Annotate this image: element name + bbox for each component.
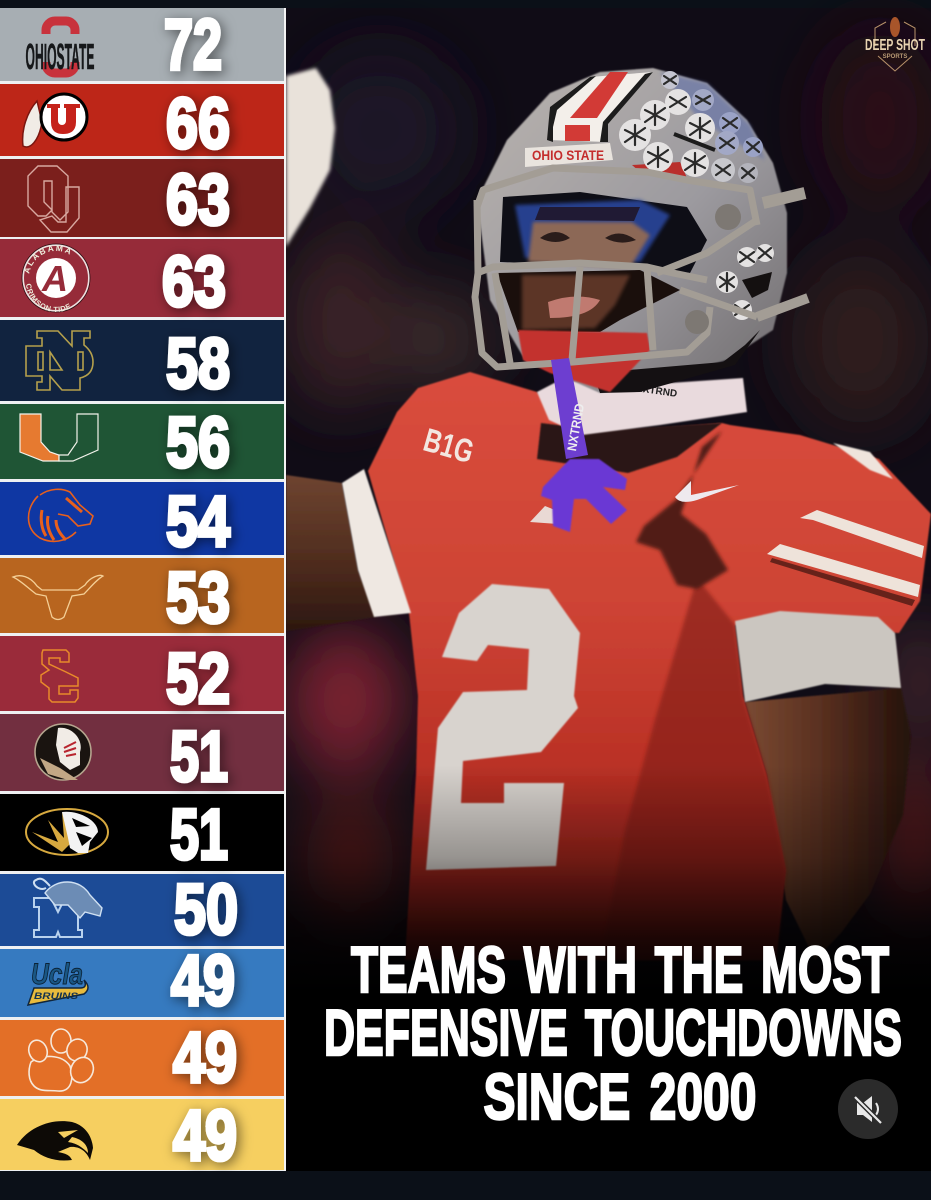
logo: Memphis — [34, 879, 102, 937]
purple mouthguard: NXTRND — [564, 402, 587, 452]
bottom fade — [286, 765, 931, 995]
icon: Deep Shot Sports logo: SPORTS — [883, 54, 907, 60]
facemask — [475, 168, 808, 367]
jersey number 2 — [426, 584, 580, 870]
chin guard — [518, 330, 650, 392]
logo: UCLA: Ucla — [31, 958, 83, 991]
logo: UCLA — [28, 958, 88, 1005]
logo: Florida State — [35, 724, 91, 780]
glove — [286, 68, 335, 247]
logo: Alabama: ALABAMA — [24, 245, 70, 274]
score: USC: 52 — [166, 640, 230, 719]
left sleeve cuff — [342, 469, 411, 617]
neck wrap — [537, 378, 747, 435]
panel: player photo — [285, 8, 931, 1171]
score: Ohio State: 72 — [164, 6, 222, 85]
score: Memphis: 50 — [174, 871, 238, 950]
score: Missouri: 51 — [170, 796, 228, 875]
panel: player photo: NXTRND — [635, 383, 678, 400]
leaf marks — [625, 76, 771, 315]
logo: Clemson paw — [26, 1029, 97, 1091]
text: OHIOSTATE — [26, 36, 94, 77]
panel: team ranking bars — [0, 8, 286, 1171]
score: Miami: 56 — [166, 404, 230, 483]
score: Texas: 53 — [166, 559, 230, 638]
neck shadow — [537, 423, 722, 473]
logo: Miami U — [20, 414, 98, 461]
logo: Texas longhorn — [13, 575, 103, 620]
score: Florida State: 51 — [170, 718, 228, 797]
logo: Boise State — [28, 489, 93, 541]
score: Notre Dame: 58 — [166, 325, 230, 404]
lower face — [497, 270, 680, 332]
helmet shell — [477, 68, 787, 393]
logo: Utah — [23, 94, 87, 147]
score: Oklahoma: 63 — [166, 161, 230, 240]
B1G patch: B1G — [420, 421, 478, 470]
logo: Oklahoma — [28, 166, 79, 232]
jersey torso and sleeve — [368, 372, 931, 960]
logo: Alabama: A — [41, 258, 68, 299]
logo: Ohio State — [26, 21, 94, 77]
logo: Alabama — [22, 244, 90, 312]
helmet stripe — [548, 72, 653, 142]
purple mouthguard — [541, 358, 627, 532]
logo: Missouri — [26, 809, 108, 855]
logo: Notre Dame — [26, 331, 93, 390]
right arm — [745, 688, 911, 960]
left arm — [286, 475, 376, 631]
dark side panel — [600, 578, 786, 960]
score: Boise State: 54 — [166, 483, 230, 562]
icon: Deep Shot Sports logo — [865, 17, 925, 71]
logo: Alabama: CRIMSON TIDE — [26, 284, 72, 312]
jaw shadow — [593, 330, 760, 393]
helmet ohio state decal — [525, 143, 613, 167]
title: SINCE 2000 — [484, 1060, 756, 1133]
logo: Southern Miss eagle — [17, 1121, 93, 1161]
icon: muted video button — [838, 1079, 898, 1139]
chest shadow — [636, 431, 728, 589]
helmet: OHIO STATE — [532, 147, 604, 163]
sleeve stripes — [800, 510, 924, 558]
score: Utah: 66 — [166, 85, 230, 164]
logo: UCLA: BRUINS — [34, 991, 79, 1002]
dome blue reflection — [660, 72, 765, 160]
logo: USC — [41, 650, 78, 702]
score: Alabama: 63 — [162, 243, 226, 322]
helmet — [475, 68, 808, 393]
helmet front red trim — [632, 162, 687, 178]
title — [324, 933, 902, 1133]
score: UCLA: 49 — [171, 942, 235, 1021]
buckeye leaf stickers — [619, 71, 774, 320]
score: Southern Miss: 49 — [173, 1097, 237, 1176]
shoulder white accent — [833, 443, 893, 479]
grey undershirt sleeve — [735, 611, 901, 702]
visor — [500, 192, 707, 273]
nike swoosh — [675, 481, 739, 502]
chest leaf badge — [530, 506, 560, 524]
score: Clemson: 49 — [173, 1019, 237, 1098]
scores column — [162, 6, 238, 1176]
